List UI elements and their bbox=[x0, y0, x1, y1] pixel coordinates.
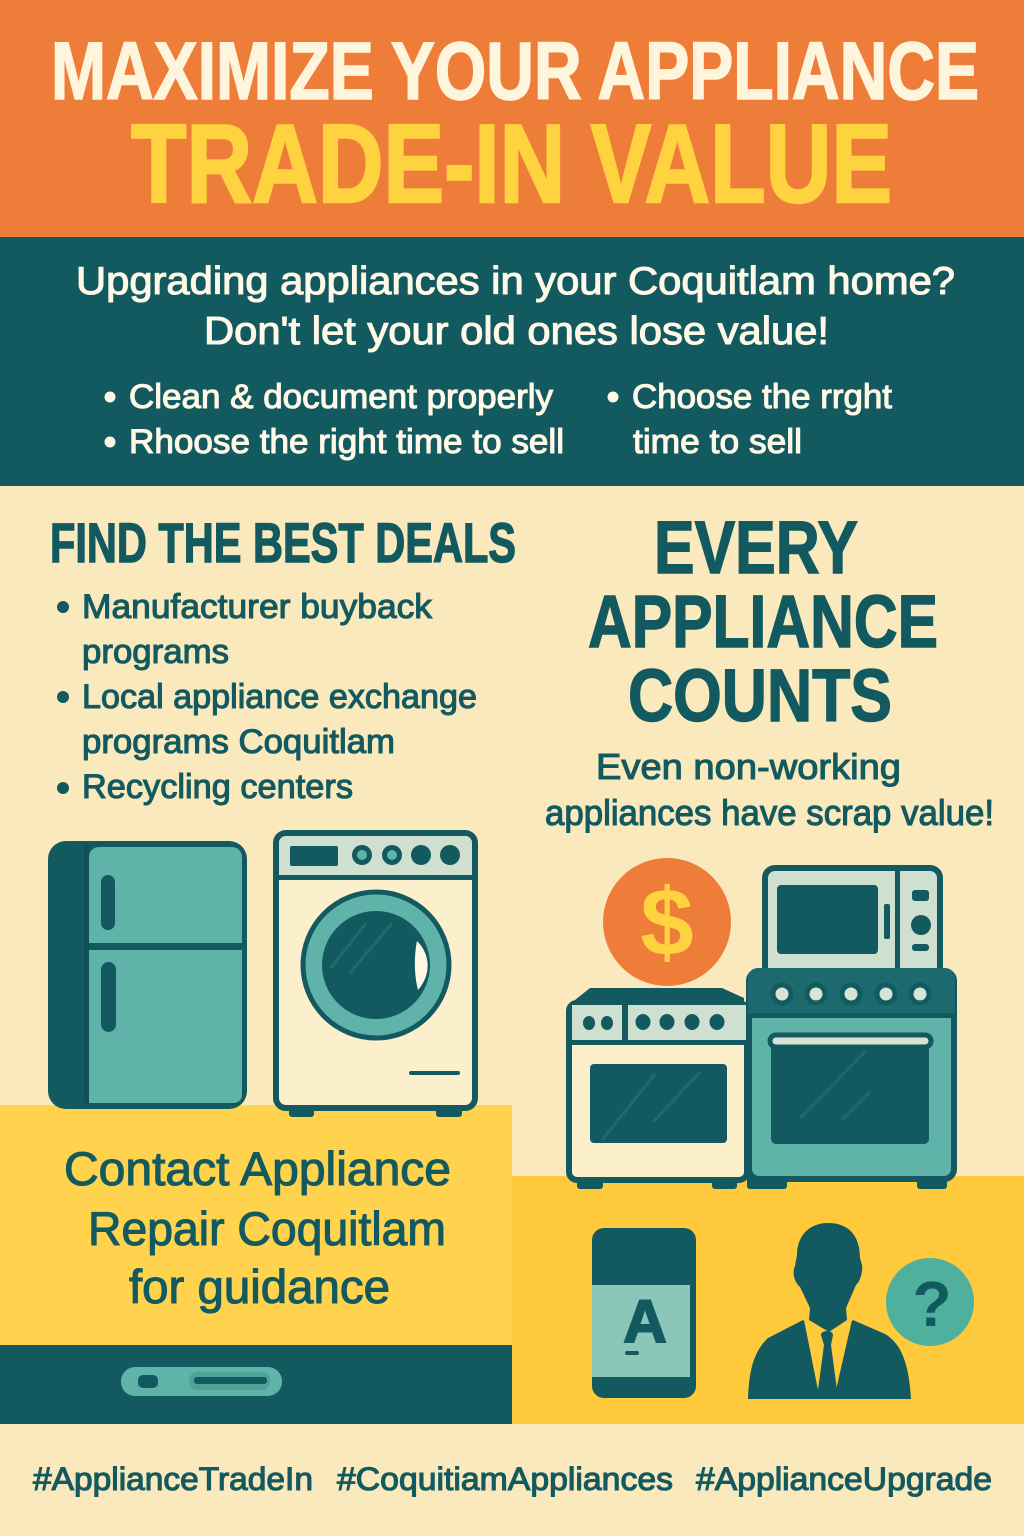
icon: teal oven bbox=[747, 968, 955, 1189]
intro bullets right bbox=[608, 378, 893, 461]
panel: right yellow block bbox=[512, 1176, 1024, 1424]
intro line 1: Upgrading appliances in your Coquitlam home? bbox=[76, 260, 955, 303]
icon: question bubble bbox=[886, 1258, 974, 1346]
icon: phone bbox=[592, 1228, 696, 1398]
text: scrap value note: Even non-working bbox=[596, 746, 901, 787]
icon: white oven bbox=[569, 988, 747, 1189]
intro bullets left: Clean & document properly bbox=[129, 378, 553, 416]
intro bullets left bbox=[104, 378, 564, 461]
icon: dollar coin bbox=[603, 858, 731, 986]
intro line 2: Don't let your old ones lose value! bbox=[204, 310, 829, 353]
contact text: for guidance bbox=[129, 1260, 390, 1313]
intro bullets left: Rhoose the right time to sell bbox=[129, 423, 564, 461]
list: deal sources bbox=[57, 588, 477, 806]
panel: title banner bbox=[0, 0, 1024, 237]
icon: dollar coin: $ bbox=[640, 869, 694, 976]
icon: person in suit bbox=[748, 1223, 911, 1399]
panel: dark strip with slot bbox=[0, 1345, 512, 1424]
icon: question bubble: ? bbox=[912, 1268, 952, 1340]
icon: card slot bbox=[121, 1367, 282, 1396]
hashtags: #CoquitiamAppliances bbox=[337, 1461, 673, 1497]
heading: every appliance counts: APPLIANCE bbox=[588, 580, 938, 663]
icon: phone: A bbox=[623, 1288, 667, 1355]
heading: every appliance counts: EVERY bbox=[654, 506, 858, 589]
text: scrap value note bbox=[545, 746, 994, 833]
list: deal sources: programs Coquitlam bbox=[82, 723, 395, 761]
panel: intro bbox=[0, 237, 1024, 486]
list: deal sources: Local appliance exchange bbox=[82, 678, 477, 716]
intro bullets right: time to sell bbox=[633, 423, 802, 461]
contact text: Contact Appliance bbox=[64, 1142, 451, 1195]
list: deal sources: Manufacturer buyback bbox=[82, 588, 433, 626]
heading: every appliance counts bbox=[588, 506, 938, 737]
text: scrap value note: appliances have scrap value! bbox=[545, 792, 994, 833]
panel: contact callout bbox=[0, 1105, 512, 1345]
icon: refrigerator bbox=[48, 841, 247, 1109]
icon: microwave bbox=[765, 868, 940, 978]
contact text bbox=[64, 1142, 451, 1313]
list: deal sources: Recycling centers bbox=[82, 768, 353, 806]
hashtags bbox=[33, 1461, 992, 1497]
intro bullets right: Choose the rrght bbox=[632, 378, 893, 416]
contact text: Repair Coquitlam bbox=[88, 1202, 446, 1255]
heading: every appliance counts: COUNTS bbox=[628, 654, 892, 737]
list: deal sources: programs bbox=[82, 633, 229, 671]
hashtags: #ApplianceTradeIn bbox=[33, 1461, 313, 1497]
hashtags: #ApplianceUpgrade bbox=[696, 1461, 992, 1497]
icon: washing machine bbox=[276, 833, 475, 1117]
heading: find the best deals: FIND THE BEST DEALS bbox=[50, 511, 516, 574]
